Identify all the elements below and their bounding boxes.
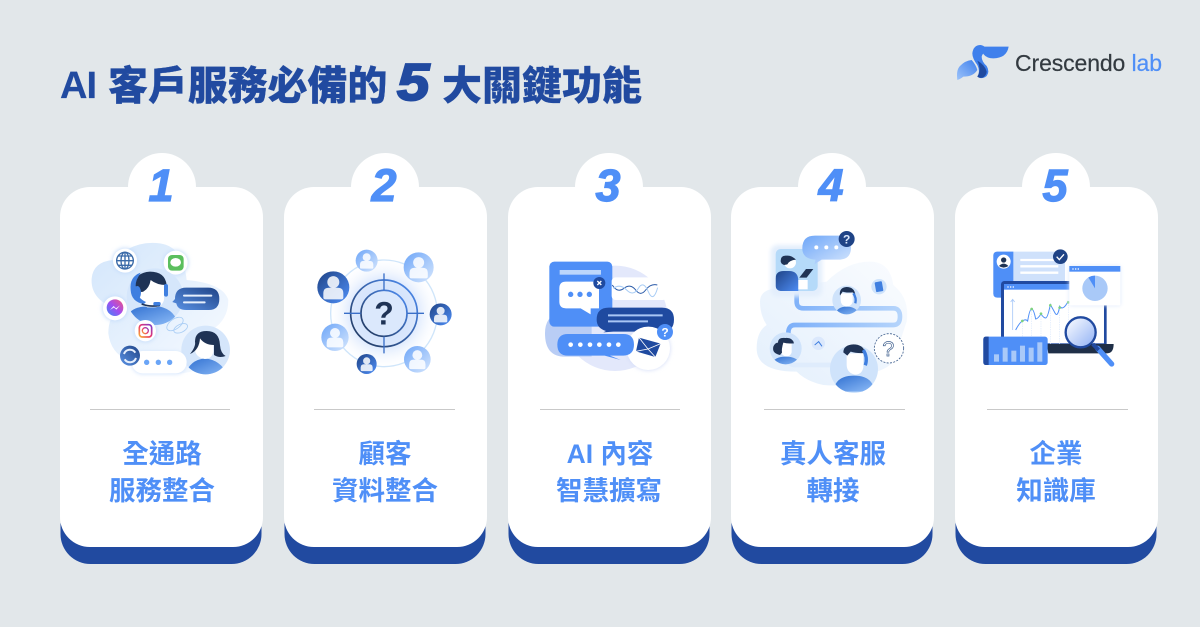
icon: pelican logo mark <box>957 45 1009 80</box>
label: 資料整合 <box>332 476 438 506</box>
label: 真人客服 <box>780 439 886 469</box>
card base <box>955 153 1158 564</box>
number 2: 2 <box>370 160 397 211</box>
card base <box>60 153 263 564</box>
title: 大關鍵功能 <box>442 64 642 108</box>
panel: card 2 <box>284 153 487 564</box>
card base <box>731 153 934 564</box>
divider <box>987 409 1128 410</box>
label: 服務整合 <box>109 476 215 506</box>
logo: Crescendo lab <box>957 45 1162 80</box>
illustration: human agent handoff: ? <box>882 337 894 361</box>
divider <box>314 409 455 410</box>
illustration: omnichannel service <box>92 243 230 377</box>
label: 轉接 <box>806 476 860 506</box>
number 5: 5 <box>1042 160 1068 211</box>
card base <box>508 153 711 564</box>
divider <box>764 409 905 410</box>
panel: card 4 <box>731 153 934 564</box>
label: 知識庫 <box>1016 476 1096 506</box>
illustration: knowledge base dashboard <box>983 249 1120 365</box>
label: 智慧擴寫 <box>556 476 662 506</box>
illustration: AI content writing: ? <box>661 325 669 339</box>
label: 企業 <box>1030 439 1082 469</box>
label: AI 內容 <box>567 439 653 469</box>
title: 5 <box>397 53 431 111</box>
title: 客戶服務必備的 <box>108 64 387 108</box>
illustration: human agent handoff: ? <box>843 232 850 246</box>
label: 顧客 <box>358 439 412 469</box>
divider <box>90 409 230 410</box>
number 1: 1 <box>148 160 174 211</box>
panel: card 3 <box>508 153 711 564</box>
card base <box>284 153 487 564</box>
title: AI <box>60 65 96 107</box>
divider <box>540 409 680 410</box>
panel: card 1 <box>60 153 263 564</box>
number 4: 4 <box>817 160 844 211</box>
illustration: AI content writing <box>545 262 674 371</box>
illustration: customer data target <box>317 250 452 374</box>
label: 全通路 <box>122 439 202 469</box>
title <box>60 53 642 111</box>
number 3: 3 <box>595 160 621 211</box>
panel: card 5 <box>955 153 1158 564</box>
illustration: customer data target: ? <box>374 296 394 332</box>
illustration: human agent handoff <box>757 231 907 393</box>
logo wordmark: Crescendo lab <box>1015 50 1162 76</box>
